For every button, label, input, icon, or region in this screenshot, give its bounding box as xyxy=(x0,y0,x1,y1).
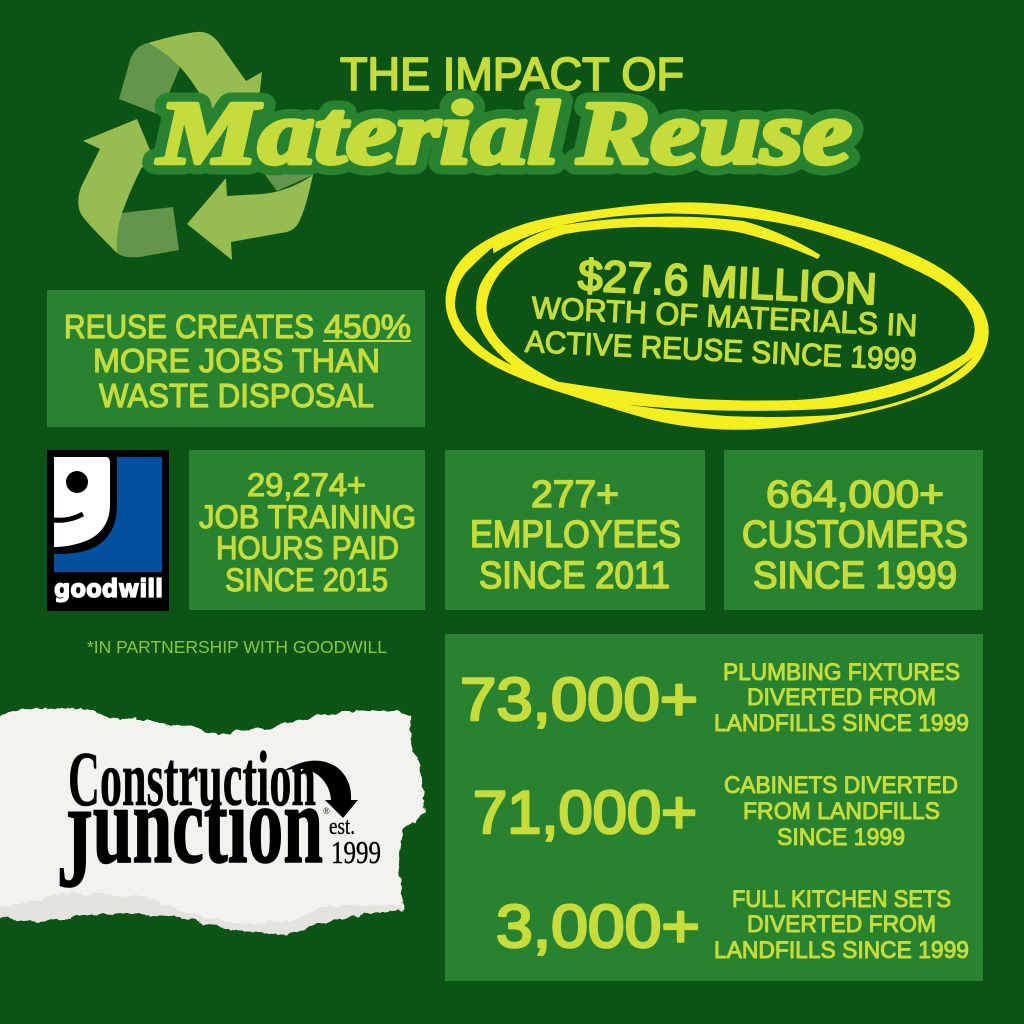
stat: cabinets: SINCE 1999 xyxy=(777,824,905,851)
stat: kitchen sets: FULL KITCHEN SETS xyxy=(732,886,951,913)
callout: hand-drawn yellow circle xyxy=(445,202,989,430)
callout text: 27.6 million: WORTH OF MATERIALS IN xyxy=(531,290,918,343)
heading: material reuse xyxy=(155,84,852,183)
logo wordmark: ® xyxy=(323,806,330,816)
panel: employees: EMPLOYEES xyxy=(470,514,681,556)
stat: kitchen sets: 3,000+ xyxy=(496,893,700,960)
heading: the impact of: THE IMPACT OF xyxy=(340,48,684,100)
panel: job training hours: JOB TRAINING xyxy=(199,499,416,535)
panel: landfill diversion stats xyxy=(445,634,983,981)
note: partnership with goodwill: *IN PARTNERSHIP WITH GOODWILL xyxy=(87,637,387,657)
panel: customers: CUSTOMERS xyxy=(742,514,968,556)
stat: cabinets: 71,000+ xyxy=(473,779,697,846)
panel: reuse creates jobs: WASTE DISPOSAL xyxy=(99,377,374,414)
stat: kitchen sets: LANDFILLS SINCE 1999 xyxy=(714,937,969,964)
stat: plumbing fixtures xyxy=(460,659,969,737)
stat: cabinets: CABINETS DIVERTED xyxy=(724,772,958,799)
stat: cabinets xyxy=(473,772,958,851)
panel: job training hours xyxy=(189,450,425,610)
logo wordmark: unctıon xyxy=(93,763,323,887)
logo wordmark xyxy=(57,735,381,911)
panel: reuse creates jobs xyxy=(47,290,425,427)
callout text: 27.6 million: $27.6 MILLION xyxy=(577,251,878,314)
stat: kitchen sets: DIVERTED FROM xyxy=(747,911,936,938)
torn paper with construction junction logo xyxy=(0,708,424,935)
panel: reuse creates jobs: 450% xyxy=(324,308,411,345)
heading: material reuse: Reuse xyxy=(576,84,852,183)
panel: job training hours: 29,274+ xyxy=(247,467,366,503)
logo wordmark: est. xyxy=(329,814,355,840)
panel: reuse creates jobs: REUSE CREATES xyxy=(64,308,314,345)
panel: reuse creates jobs: MORE JOBS THAN xyxy=(93,342,380,379)
heading: material reuse: Material xyxy=(155,84,559,183)
stat: plumbing fixtures: 73,000+ xyxy=(460,666,698,733)
heading: material reuse: Reuse xyxy=(576,84,852,183)
icon: recycling arrows xyxy=(78,32,320,260)
logo wordmark: Construction xyxy=(68,735,316,822)
logo: goodwill: goodwill xyxy=(54,574,163,603)
logo: goodwill xyxy=(47,450,169,611)
panel: employees: SINCE 2011 xyxy=(479,555,670,597)
stat: kitchen sets xyxy=(496,886,969,964)
panel: employees: 277+ xyxy=(531,474,619,516)
panel: employees xyxy=(445,450,705,610)
logo wordmark: J xyxy=(57,787,93,911)
panel: customers: 664,000+ xyxy=(766,474,944,516)
heading: material reuse: Material xyxy=(155,84,559,183)
panel: customers: SINCE 1999 xyxy=(753,555,957,597)
panel: customers xyxy=(724,450,983,610)
callout text: 27.6 million: ACTIVE REUSE SINCE 1999 xyxy=(524,324,917,377)
callout text: 27.6 million xyxy=(524,249,921,377)
logo wordmark: 1999 xyxy=(331,834,381,870)
stat: plumbing fixtures: LANDFILLS SINCE 1999 xyxy=(714,710,969,737)
panel: job training hours: SINCE 2015 xyxy=(225,562,388,598)
stat: plumbing fixtures: PLUMBING FIXTURES xyxy=(723,659,960,686)
panel: job training hours: HOURS PAID xyxy=(216,530,399,566)
stat: plumbing fixtures: DIVERTED FROM xyxy=(747,684,936,711)
stat: cabinets: FROM LANDFILLS xyxy=(743,798,940,825)
